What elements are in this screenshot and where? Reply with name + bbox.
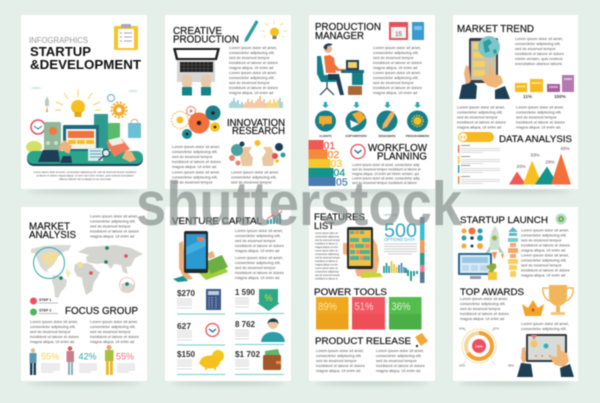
text block: features copy: Lorem ipsum dolor sit: [315, 267, 338, 270]
text block: features copy: sed do eiusmod tempor: [315, 274, 340, 277]
text block: manager copy: magna aliqua. Ut enim ad: [373, 65, 417, 70]
text block: focus group left: consectetur adipiscing elit,: [30, 324, 76, 329]
icon: trophy: [543, 285, 573, 315]
title: infographics startup and development: STARTUP: [30, 44, 91, 59]
chart: money stacks 11 percent: [515, 79, 543, 99]
person stat: 55 percent yellow: 55%: [41, 352, 59, 362]
text block: venture capital copy: consectetur adipiscing elit,: [235, 260, 281, 265]
chart: numbered steps 01 to 05: 02: [328, 149, 339, 161]
icon: blue book: [412, 22, 424, 40]
stat: 500 options data: OPTIONS: [384, 213, 398, 217]
text block: launch copy: consectetur adipiscing elit,: [521, 258, 567, 262]
text block: focus group right: incididunt ut labore et dolore: [90, 334, 139, 339]
text block: launch copy: incididunt ut labore et dolore: [521, 242, 570, 248]
stat: $150 with piggy bank: [177, 350, 225, 375]
text block: release right: sed do eiusmod tempor: [376, 358, 417, 363]
text block: venture capital copy: Lorem ipsum dolor sit amet,: [235, 255, 283, 260]
text block: features copy: incididunt ut labore et: [315, 242, 338, 246]
chart: donut with callouts: 15%: [459, 364, 465, 368]
heading: production manager: MANAGER: [315, 31, 364, 42]
panel: creative production and innovation research: [165, 15, 291, 189]
text block: market trend copy: minim veniam, quis nostrud: [515, 56, 562, 61]
chart: money stacks 150 percent: 150%: [554, 94, 566, 99]
chart: donut with callouts: 20%: [459, 326, 465, 330]
text block: release right: consectetur adipiscing elit,: [376, 353, 422, 358]
stat: $1 702 with wallet: $1 702: [235, 350, 261, 359]
stat: $150 with piggy bank: $150: [177, 350, 196, 359]
illustration: tablet with medal and hands: [517, 334, 574, 377]
stat: 500 options data: 500: [384, 221, 417, 242]
text block: manager copy: magna aliqua. Ut enim ad: [373, 90, 417, 95]
chart: money stacks 150 percent: [547, 75, 574, 99]
stat: 8 762 with businessman: 8 762: [235, 320, 256, 329]
heading: workflow planning: WORKFLOW: [368, 143, 428, 154]
text block: right market copy: magna aliqua. Ut enim ad: [516, 124, 560, 130]
text block: left market copy: consectetur adipiscing elit,: [457, 110, 503, 114]
icon group: clients: [315, 102, 336, 138]
heading: features list: LIST: [314, 221, 334, 232]
title: infographics startup and development: INFOGRAPHICS: [29, 36, 88, 45]
text block: manager copy: incididunt ut labore et dolore: [373, 60, 422, 65]
stat: 1 590 with percent arrow: %: [264, 293, 273, 303]
icon group: clients: CLIENTS: [319, 134, 332, 138]
icon: orange note: [415, 333, 428, 347]
icon group: copywriters: COPYWRITERS: [345, 134, 367, 138]
icon: pencil: [244, 20, 258, 42]
text block: release left: magna aliqua. Ut enim ad: [316, 368, 360, 373]
stat: $270 with calculator: $270: [177, 289, 196, 298]
illustration: tablet, globe and hands: [459, 36, 510, 99]
heading: market analysis: [29, 222, 76, 241]
chart: numbered steps 01 to 05: 04: [334, 167, 345, 179]
panel: startup launch and top awards: [453, 207, 578, 381]
text block: left market copy: sed do eiusmod tempor: [457, 114, 498, 120]
heading: focus group: FOCUS GROUP: [65, 306, 138, 317]
stat: 8 762 with businessman: [235, 318, 285, 345]
legend: step 1 and step 2: STEP 1: [39, 298, 51, 302]
text block: research copy: consectetur adipiscing elit,: [231, 174, 277, 180]
panel: features, power tools and product release: [309, 207, 435, 381]
text block: manager copy: Lorem ipsum dolor sit amet,: [373, 45, 421, 50]
text block: awards side copy: consectetur adipiscing elit,: [521, 326, 567, 331]
text block: innovation copy: sed do eiusmod tempor: [172, 154, 213, 159]
text block: venture capital copy: magna aliqua. Ut enim ad: [235, 248, 279, 253]
illustration: gears: [172, 106, 220, 139]
heading: data analysis: DATA ANALYSIS: [499, 134, 572, 145]
icon group: designers: [376, 102, 398, 138]
heading: production manager: [315, 22, 381, 42]
text block: launch copy: sed do eiusmod tempor: [521, 238, 562, 242]
chart: numbered steps 01 to 05: 03: [330, 158, 342, 170]
stat: 627 with clock: [177, 322, 225, 346]
text block: left market copy: incididunt ut labore et dolore: [457, 120, 506, 124]
text block: innovation copy: sed do eiusmod tempor: [172, 180, 213, 184]
text block: creative production copy: consectetur adipiscing elit,: [229, 75, 275, 80]
text block: manager copy: sed do eiusmod tempor: [373, 55, 414, 60]
stat tile: 51 percent: 51%: [354, 301, 374, 313]
text block: cover footer: ullamco laboris nisi ut aliquip ex ea commodo: [59, 177, 112, 181]
heading: market analysis: MARKET: [29, 222, 70, 232]
chart: donut with callouts: 27%: [493, 326, 499, 330]
watermark: shutterstock: shutterstock: [136, 170, 462, 239]
text block: awards side copy: Lorem ipsum dolor sit amet,: [521, 321, 569, 326]
title: infographics startup and development: [29, 36, 141, 72]
icon: clipboard: [114, 24, 138, 50]
stat: 500 options data: [384, 213, 417, 254]
illustration: monitor and plant: [458, 253, 497, 280]
text block: launch copy: sed do eiusmod tempor: [521, 262, 562, 268]
text block: features copy: sed do eiusmod tempor: [315, 239, 340, 242]
text block: innovation copy: incididunt ut labore et dolore: [172, 159, 221, 164]
text block: manager copy: consectetur adipiscing elit,: [373, 75, 419, 80]
heading: innovation research: RESEARCH: [232, 126, 285, 137]
text block: features copy: consectetur adipiscing: [315, 270, 339, 274]
heading: startup launch: STARTUP LAUNCH: [460, 215, 548, 226]
stat tile: 51 percent: [352, 297, 385, 330]
icon: crown: [522, 300, 544, 316]
text block: manager copy: incididunt ut labore et dolore: [373, 85, 422, 90]
text block: features copy: incididunt ut labore et: [315, 278, 338, 280]
heading: innovation research: [227, 118, 285, 137]
text block: focus group left: Lorem ipsum dolor sit amet,: [30, 319, 78, 324]
text block: venture capital copy: sed do eiusmod tempor: [235, 238, 276, 243]
stat: $270 with calculator: [177, 289, 225, 314]
stat tile: 89 percent: [316, 297, 348, 330]
text block: focus group right: sed do eiusmod tempor: [90, 329, 131, 334]
chart: donut with callouts: 38%: [508, 364, 514, 368]
text block: release right: incididunt ut labore et dolore: [376, 363, 425, 368]
text block: innovation copy: magna aliqua. Ut enim ad: [172, 164, 216, 169]
text block: focus group left: sed do eiusmod tempor: [30, 329, 71, 334]
stat tile: 89 percent: 89%: [318, 301, 337, 313]
stat: 1 590 with percent arrow: [235, 288, 284, 314]
text block: features copy: consectetur adipiscing: [315, 253, 339, 256]
text block: release left: incididunt ut labore et dolore: [316, 363, 365, 368]
heading: production manager: PRODUCTION: [315, 22, 381, 33]
text block: launch copy: Lorem ipsum dolor sit amet,: [521, 252, 569, 258]
panel: startup and development cover: [21, 15, 147, 189]
illustration: totem shapes: [508, 227, 518, 277]
text block: venture capital copy: incididunt ut labore et dolore: [235, 270, 284, 275]
person stat: 42 percent teal: [66, 346, 97, 375]
text block: workflow copy: Lorem ipsum dolor sit amet, consectetur adip: [352, 163, 420, 167]
text block: launch copy: magna aliqua. Ut enim ad: [521, 248, 565, 252]
person stat: 42 percent teal: 42%: [78, 352, 97, 362]
chart: triangle percentages: 29%: [545, 160, 555, 164]
heading: venture capital: VENTURE CAPITAL: [172, 216, 262, 227]
text block: workflow copy: magna aliqua. Ut enim ad minim veniam, qui: [352, 172, 419, 176]
heading: power tools: POWER TOOLS: [314, 287, 387, 298]
person stat: 55 percent yellow: [30, 348, 60, 375]
text block: research copy: Lorem ipsum dolor sit amet,: [231, 170, 279, 174]
text block: features copy: incididunt ut labore et: [315, 260, 338, 263]
text block: cover footer: ut labore et dolore magna aliqua. Ut enim ad minim veniam, quis nostrud exercitation: [36, 174, 134, 178]
text block: creative production copy: sed do eiusmod tempor: [229, 55, 270, 60]
text block: market analysis copy: consectetur adipiscing elit,: [90, 218, 136, 224]
panel: market trend and data analysis: [453, 15, 578, 189]
chart: triangle percentages: 33%: [530, 152, 540, 158]
text block: market trend copy: exercitation ullamco laboris: [515, 61, 562, 66]
text block: creative production copy: consectetur adipiscing elit,: [229, 50, 275, 55]
text block: launch copy: incididunt ut labore et dolore: [521, 268, 570, 272]
text block: launch copy: Lorem ipsum dolor sit amet,: [521, 228, 569, 232]
text block: innovation copy: consectetur adipiscing elit,: [172, 149, 218, 154]
chart: small colored bars: [384, 261, 417, 281]
text block: focus group right: consectetur adipiscing elit,: [90, 324, 136, 329]
text block: features copy: Lorem ipsum dolor sit: [315, 232, 338, 235]
text block: features copy: sed do eiusmod tempor: [315, 256, 340, 260]
stat: $1 702 with wallet: [235, 349, 284, 375]
chart: world map with pins: [31, 245, 143, 298]
text block: innovation copy: Lorem ipsum dolor sit amet,: [172, 144, 220, 149]
text block: venture capital copy: magna aliqua. Ut enim ad: [235, 275, 279, 280]
text block: cover footer: [34, 170, 137, 181]
text block: creative production copy: incididunt ut labore et dolore: [229, 60, 278, 65]
text block: market trend copy: Lorem ipsum dolor sit amet,: [515, 36, 563, 41]
text block: launch copy: magna aliqua. Ut enim ad: [521, 272, 565, 278]
legend: step 1 and step 2: STEP 2: [39, 308, 51, 312]
illustration: laptop with hands: [173, 48, 220, 96]
text block: market trend copy: sed do eiusmod tempor: [515, 46, 556, 51]
text block: venture capital copy: sed do eiusmod tempor: [235, 265, 276, 270]
illustration: rocket: [484, 226, 504, 260]
icon: light bulb: [261, 20, 287, 39]
stat: 627 with clock: 627: [177, 322, 192, 331]
text block: right market copy: incididunt ut labore et dolore: [516, 120, 565, 124]
text block: venture capital copy: Lorem ipsum dolor sit amet,: [235, 228, 283, 233]
text block: right market copy: consectetur adipiscing elit,: [516, 110, 562, 114]
text block: release left: sed do eiusmod tempor: [316, 358, 357, 363]
text block: release left: Lorem ipsum dolor sit amet,: [316, 348, 364, 353]
chart: triangle percentages: 45%: [560, 146, 570, 151]
text block: market analysis copy: Lorem ipsum dolor sit amet,: [90, 214, 138, 218]
legend: data analysis items: [458, 145, 500, 184]
heading: innovation research: INNOVATION: [227, 118, 285, 129]
illustration: phone in hand with cards: [173, 231, 228, 282]
icon: clock: [351, 144, 365, 158]
text block: features copy: [315, 232, 340, 280]
text block: manager copy: consectetur adipiscing elit,: [373, 50, 419, 55]
panel: venture capital: [165, 207, 291, 381]
text block: release right: Lorem ipsum dolor sit amet,: [376, 348, 424, 353]
text block: market analysis copy: magna aliqua. Ut enim ad: [90, 234, 134, 238]
text block: creative production copy: incididunt ut labore et dolore: [229, 85, 278, 90]
icon grid: colored dots: [462, 228, 483, 249]
text block: left market copy: Lorem ipsum dolor sit amet,: [457, 104, 505, 110]
chart: bar frequency: [230, 96, 282, 108]
text block: focus group right: Lorem ipsum dolor sit amet,: [90, 319, 138, 324]
chart: vertical color strip: [420, 217, 424, 283]
heading: features list: [314, 212, 365, 232]
heading: creative production: PRODUCTION: [173, 34, 239, 46]
text block: right market copy: Lorem ipsum dolor sit amet,: [516, 104, 564, 110]
text block: workflow copy: sed do eiusmod tempor incididunt ut labore: [352, 181, 417, 185]
illustration: manager at desk: [317, 43, 364, 95]
chart: numbered steps 01 to 05: [308, 140, 348, 188]
heading: market trend: MARKET TREND: [457, 24, 534, 35]
stat tile: 36 percent: [389, 297, 422, 330]
person stat: 55 percent red: 55%: [116, 352, 134, 362]
text block: market analysis copy: sed do eiusmod tempor: [90, 224, 131, 228]
text block: right market copy: sed do eiusmod tempor: [516, 114, 557, 120]
text block: creative production copy: magna aliqua. Ut enim ad: [229, 65, 273, 70]
text block: creative production copy: Lorem ipsum dolor sit amet,: [229, 45, 277, 50]
panel: production manager and workflow planning: [308, 15, 435, 189]
text block: features copy: consectetur adipiscing: [315, 236, 339, 238]
icon: target: [556, 214, 566, 224]
title: infographics startup and development: &DEVELOPMENT: [30, 57, 141, 72]
text block: release left: consectetur adipiscing elit,: [316, 353, 362, 358]
text block: manager copy: Lorem ipsum dolor sit amet,: [373, 70, 421, 75]
icon group: programmers: PROGRAMMERS: [406, 134, 429, 138]
text block: market trend copy: incididunt ut labore et dolore: [515, 51, 564, 56]
text block: launch copy: consectetur adipiscing elit,: [521, 232, 567, 238]
text block: focus group left: incididunt ut labore et dolore: [30, 334, 79, 339]
text block: innovation copy: consectetur adipiscing elit,: [172, 174, 218, 180]
text block: creative production copy: magna aliqua. Ut enim ad: [229, 90, 273, 95]
stat: 1 590 with percent arrow: 1 590: [235, 288, 256, 297]
text block: awards copy: incididunt ut labore et dolore: [460, 311, 509, 316]
illustration: hands with ideas: [229, 140, 286, 166]
icon: calendar: 15: [395, 32, 402, 38]
panel: market analysis and focus group: [21, 207, 147, 381]
text block: creative production copy: sed do eiusmod tempor: [229, 80, 270, 85]
text block: features copy: magna aliqua ut enim: [315, 264, 338, 266]
text block: focus group left: magna aliqua. Ut enim ad: [30, 339, 74, 344]
heading: top awards: TOP AWARDS: [460, 287, 524, 298]
icon group: copywriters: [345, 102, 367, 138]
text block: venture capital copy: incididunt ut labore et dolore: [235, 243, 284, 248]
icon: calendar: [389, 22, 408, 40]
chart: donut with callouts: [459, 326, 514, 368]
text block: awards copy: consectetur adipiscing elit,: [460, 301, 506, 306]
heading: market analysis: ANALYSIS: [29, 230, 76, 241]
chart: numbered steps 01 to 05: 01: [324, 140, 335, 152]
heading: creative production: [173, 26, 239, 46]
chart: donut with callouts: 100%: [475, 344, 483, 348]
legend: step 1 and step 2: [30, 298, 58, 316]
chart: money stacks 11 percent: 11%: [523, 94, 532, 99]
text block: workflow copy: sed do eiusmod tempor incididunt ut labore et: [352, 168, 421, 172]
stat tile: 36 percent: 36%: [392, 301, 411, 313]
text block: awards copy: Lorem ipsum dolor sit amet,: [460, 296, 508, 301]
illustration: startup scene: [26, 86, 143, 166]
text block: left market copy: magna aliqua. Ut enim ad: [457, 124, 501, 130]
text block: features copy: magna aliqua ut enim: [315, 246, 338, 249]
heading: features list: FEATURES: [314, 212, 365, 223]
text block: creative production copy: Lorem ipsum dolor sit amet,: [229, 70, 277, 75]
text block: workflow copy: Lorem ipsum dolor sit amet, consectetur adip: [352, 176, 420, 180]
icon: yellow progress pill: [458, 132, 494, 142]
icon group: programmers: [406, 102, 429, 138]
text block: features copy: Lorem ipsum dolor sit: [315, 250, 338, 252]
text block: awards copy: magna aliqua. Ut enim ad: [460, 316, 504, 321]
text block: innovation copy: Lorem ipsum dolor sit amet,: [172, 170, 220, 174]
text block: focus group right: magna aliqua. Ut enim ad: [90, 339, 134, 344]
person stat: 55 percent red: [105, 345, 135, 375]
text block: market analysis copy: incididunt ut labore et dolore: [90, 228, 139, 234]
heading: workflow planning: PLANNING: [377, 152, 427, 162]
chart: triangle percentages: [509, 146, 571, 184]
heading: workflow planning: [368, 143, 428, 162]
text block: research copy: sed do eiusmod tempor: [231, 180, 272, 184]
heading: creative production: CREATIVE: [173, 26, 222, 37]
illustration: phone with app grid in hand: [343, 227, 383, 278]
text block: cover footer: Lorem ipsum dolor sit amet, consectetur adipiscing elit, sed do eiusmod tempor incididunt: [34, 170, 137, 174]
stat: 500 options data: OPTIONS DATA: [384, 237, 415, 242]
heading: product release: PRODUCT RELEASE: [315, 336, 411, 347]
text block: market trend copy: consectetur adipiscing elit,: [515, 41, 561, 46]
text block: venture capital copy: consectetur adipiscing elit,: [235, 233, 281, 238]
text block: release right: magna aliqua. Ut enim ad: [376, 368, 420, 373]
text block: awards copy: sed do eiusmod tempor: [460, 306, 501, 311]
chart: triangle percentages: 20%: [516, 164, 526, 169]
text block: manager copy: sed do eiusmod tempor: [373, 80, 414, 85]
icon group: designers: DESIGNERS: [378, 134, 396, 138]
chart: numbered steps 01 to 05: 05: [336, 176, 348, 188]
icon: rising chart: [267, 211, 282, 224]
